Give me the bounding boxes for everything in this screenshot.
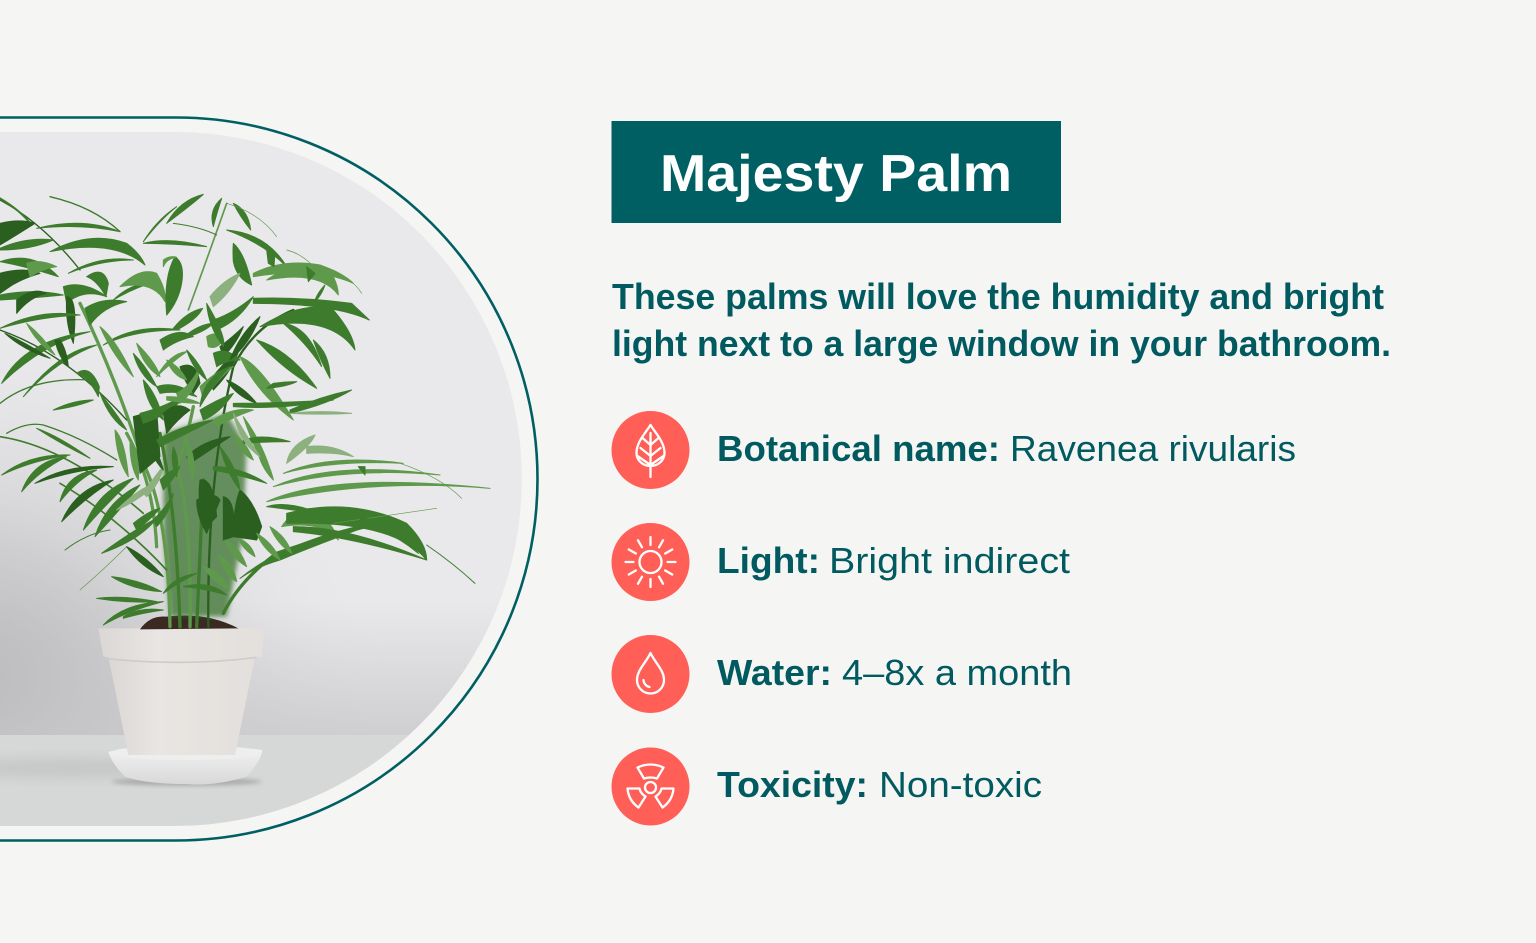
title banner: [612, 121, 1061, 223]
central upright leaves: [166, 257, 182, 315]
outline arc around photo: [0, 118, 538, 840]
item: toxicity: Non-toxic: [879, 764, 1042, 805]
icon: sun: [612, 523, 690, 601]
stems: [80, 303, 380, 627]
description text: These palms will love the humidity and bright: [612, 276, 1384, 317]
icon: water drop: [612, 635, 690, 713]
item: botanical name: [612, 411, 1296, 489]
right upper fronds: [207, 303, 224, 347]
item: toxicity: [612, 748, 1042, 826]
item: water: Water:: [717, 652, 832, 693]
description text: [612, 276, 1391, 364]
item: light: [612, 523, 1070, 601]
long right fronds: [283, 460, 403, 473]
soft dark central foliage mass: [163, 413, 247, 617]
left fronds: [7, 424, 117, 460]
title banner: Majesty Palm: [660, 145, 1012, 203]
item: water: [612, 635, 1072, 713]
item: light: Light:: [717, 540, 820, 581]
item: light: Bright indirect: [829, 540, 1070, 581]
photo panel: majesty palm in white pot: [0, 132, 530, 830]
icon: leaf: [612, 411, 690, 489]
fan leaflets low: [225, 540, 247, 567]
item: water: 4–8x a month: [842, 652, 1072, 693]
item: botanical name: Botanical name:: [717, 428, 1000, 469]
item: botanical name: Ravenea rivularis: [1010, 428, 1296, 469]
dense central leaflets: [233, 490, 262, 540]
description text: light next to a large window in your bathroom.: [612, 323, 1391, 364]
icon: radiation: [612, 748, 690, 826]
lower right fronds: [266, 504, 308, 511]
top fronds: [143, 207, 177, 242]
item: toxicity: Toxicity:: [717, 764, 868, 805]
upper left fronds: [37, 223, 120, 232]
